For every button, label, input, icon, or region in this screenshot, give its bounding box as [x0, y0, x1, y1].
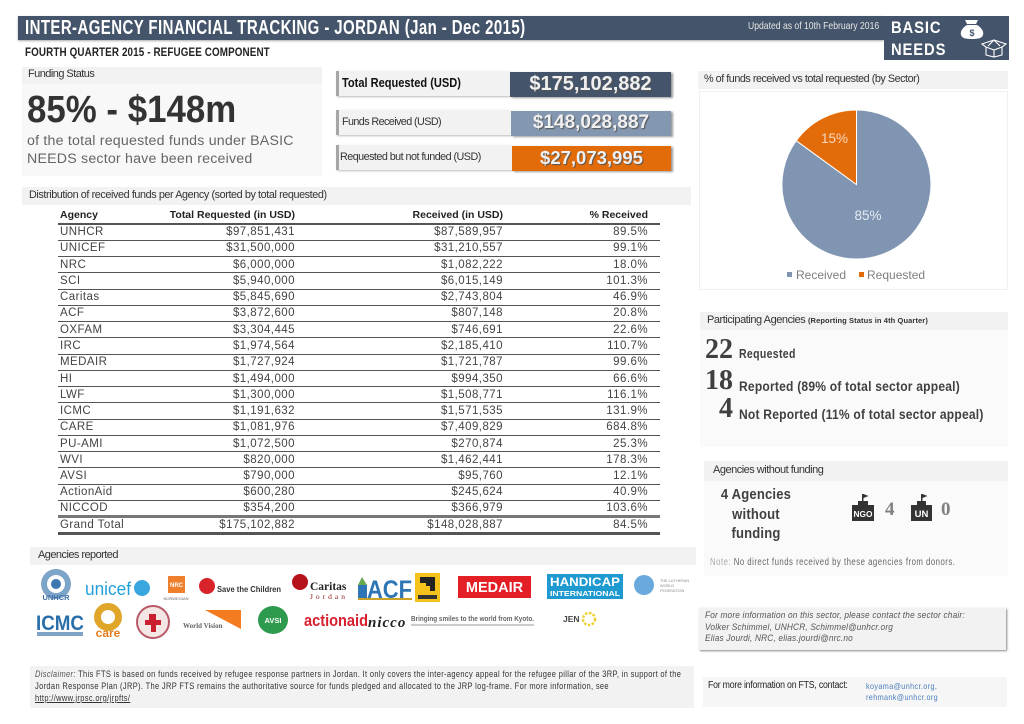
pie chart: received vs requested [699, 91, 1008, 290]
icon: UN: UN [915, 509, 928, 520]
stat label: Funds Received (USD) [342, 116, 441, 128]
table: funds per agency: WVI [60, 454, 83, 466]
heading: agencies reported [30, 547, 696, 565]
table: funds per agency: $6,015,149 [441, 275, 503, 287]
table: funds per agency: $1,081,976 [233, 421, 295, 433]
table: funds per agency: $5,845,690 [233, 291, 295, 303]
stat value: $175,102,882 [529, 73, 652, 95]
table: funds per agency: NRC [60, 259, 86, 271]
table: funds per agency: OXFAM [60, 324, 103, 336]
table: funds per agency: HI [60, 373, 72, 385]
disclaimer text: http://www.jrpsc.org/jrpfts/ [35, 693, 130, 703]
icon: UN [911, 494, 932, 521]
logo: JEN: JEN [563, 614, 580, 624]
table: funds per agency: $820,000 [243, 454, 295, 466]
stat label [336, 71, 510, 96]
logo: JEN [563, 613, 595, 625]
value: UN count: 0 [941, 499, 950, 520]
table: funds per agency: $7,409,829 [441, 421, 503, 433]
table: funds per agency: LWF [60, 389, 85, 401]
icon: open box [981, 39, 1008, 58]
table: funds per agency: 18.0% [613, 259, 648, 271]
table: funds per agency: SCI [60, 275, 81, 287]
funding description [27, 133, 294, 166]
table: funds per agency: $97,851,431 [226, 226, 295, 238]
table: funds per agency: $1,727,924 [233, 356, 295, 368]
table: funds per agency: % Received [590, 209, 648, 221]
contact text [705, 610, 965, 643]
table: funds per agency: $148,028,887 [427, 519, 503, 531]
heading: distribution of funds [22, 187, 691, 205]
table: funds per agency: $3,872,600 [233, 307, 295, 319]
logo: ICMC: ICMC [36, 612, 84, 635]
table: funds per agency: 110.7% [607, 340, 648, 352]
heading: agencies without funding: Agencies without funding [713, 464, 823, 476]
table: funds per agency: $6,000,000 [233, 259, 295, 271]
pie chart: received vs requested: 15% [821, 131, 848, 146]
heading: funding status: Funding Status [28, 68, 94, 80]
table: funds per agency: IRC [60, 340, 81, 352]
logo: ACF: ACF [367, 576, 412, 604]
heading: pie chart [698, 71, 1008, 89]
contact emails: rehmank@unhcr.org [866, 692, 938, 702]
stat label: Requested but not funded (USD) [340, 151, 481, 163]
panel: participating agencies [700, 312, 1008, 447]
pie chart: received vs requested: Requested [867, 268, 925, 282]
table: funds per agency: $87,589,957 [434, 226, 503, 238]
funding description: of the total requested funds under BASIC [27, 133, 294, 149]
table: funds per agency: $175,102,882 [219, 519, 295, 531]
table: funds per agency: Caritas [60, 291, 100, 303]
logo: IRC [415, 573, 440, 602]
contact label: For more information on FTS, contact: [708, 680, 848, 691]
logo: Lutheran World Federation: THE LUTHERAN [660, 579, 689, 583]
stat value [510, 72, 671, 97]
table: funds per agency: $1,462,441 [441, 454, 503, 466]
pie chart: received vs requested: 85% [854, 208, 882, 223]
table: funds per agency: $1,721,787 [441, 356, 503, 368]
table: funds per agency: 22.6% [613, 324, 648, 336]
table: funds per agency: CARE [60, 421, 94, 433]
table: funds per agency: 20.8% [613, 307, 648, 319]
table: funds per agency: 103.6% [606, 502, 648, 514]
table: funds per agency: $1,494,000 [233, 373, 295, 385]
logo: NRC [163, 576, 189, 601]
table: funds per agency: $1,571,535 [441, 405, 503, 417]
count: reported: Reported (89% of total sector appeal) [739, 379, 960, 395]
logo: Save the Children: Save the Children [217, 585, 281, 594]
table: funds per agency: NICCOD [60, 502, 108, 514]
table: funds per agency: $2,743,804 [441, 291, 503, 303]
logo: CARE: care [96, 626, 121, 640]
icon: money bag: $ [969, 28, 975, 38]
logo: NICCOD: Bringing smiles to the world from Kyoto. [411, 616, 534, 623]
logo: NRC: NORWEGIAN [163, 596, 189, 601]
table: funds per agency: $1,508,771 [441, 389, 503, 401]
heading: agencies reported: Agencies reported [38, 549, 118, 561]
heading: pie chart: % of funds received vs total requested (by Sector) [704, 73, 919, 85]
table: funds per agency: $2,185,410 [441, 340, 503, 352]
count: requested: 22 [705, 334, 733, 365]
logo: CARE [96, 606, 121, 640]
count: reported: 18 [705, 365, 733, 396]
stat label [336, 145, 512, 170]
table: funds per agency: $746,691 [451, 324, 503, 336]
table: funds per agency: MEDAIR [60, 356, 107, 368]
stat: requested but not funded [336, 145, 674, 174]
table: funds per agency: $95,760 [458, 470, 503, 482]
logo: UNHCR: UNHCR [42, 593, 70, 602]
logo: Caritas Jordan: Caritas [310, 581, 347, 593]
stat: funds received [336, 110, 674, 138]
panel: funding status [22, 67, 322, 176]
contact text: Elias Jourdi, NRC, elias.jourdi@nrc.no [705, 633, 853, 643]
logo: World Vision [183, 610, 241, 630]
table: funds per agency: ICMC [60, 405, 91, 417]
table: funds per agency: Grand Total [60, 519, 124, 531]
disclaimer text [35, 669, 681, 703]
table: funds per agency: Total Requested (in USD) [170, 209, 295, 221]
table: funds per agency [58, 209, 660, 535]
table: funds per agency: 40.9% [613, 486, 648, 498]
table: funds per agency: $1,974,564 [233, 340, 295, 352]
value: NGO count: 4 [885, 499, 894, 520]
table: funds per agency: ActionAid [60, 486, 113, 498]
heading: funding status [22, 67, 322, 84]
sector chair contact [699, 608, 1006, 650]
sector name: BASIC NEEDS [891, 18, 946, 59]
funding note: Note: No direct funds received by these agencies from donors. [710, 557, 955, 568]
table: funds per agency: $270,874 [451, 438, 503, 450]
count text: 4 Agencies without funding [721, 487, 791, 542]
table: funds per agency: 178.3% [606, 454, 648, 466]
table: funds per agency: 46.9% [613, 291, 648, 303]
stat: total requested [336, 71, 674, 100]
table: funds per agency: $245,624 [451, 486, 503, 498]
table: funds per agency: UNHCR [60, 226, 104, 238]
table: funds per agency: 131.9% [606, 405, 648, 417]
table: funds per agency: $1,082,222 [441, 259, 503, 271]
logo: Handicap International: HANDICAP [550, 575, 620, 589]
subtitle: FOURTH QUARTER 2015 - REFUGEE COMPONENT [25, 45, 270, 59]
pie chart: received vs requested: Received [796, 268, 846, 282]
table: funds per agency: $31,210,557 [434, 242, 503, 254]
count: not reported: Not Reported (11% of total sector appeal) [739, 407, 984, 423]
table: funds per agency: 89.5% [613, 226, 648, 238]
logo: Caritas Jordan [292, 574, 348, 601]
logo: Caritas Jordan: Jordan [310, 592, 348, 601]
count: reported [705, 365, 960, 396]
table: funds per agency: 66.6% [613, 373, 648, 385]
count: not reported [719, 393, 984, 424]
table: funds per agency: 684.8% [606, 421, 648, 433]
table: funds per agency: PU-AMI [60, 438, 103, 450]
stat value: $27,073,995 [540, 147, 643, 168]
table: funds per agency: 99.6% [613, 356, 648, 368]
logo: MEDAIR [458, 576, 531, 598]
heading: agencies without funding [704, 461, 1008, 481]
table: funds per agency: 12.1% [613, 470, 648, 482]
table: funds per agency: Received (in USD) [413, 209, 503, 221]
table: funds per agency: Agency [60, 209, 98, 221]
FTS contact [703, 677, 1007, 707]
logo: AVSI: AVSI [265, 616, 281, 625]
sector badge: basic needs [884, 16, 1009, 60]
logo: ActionAid: actionaid [304, 611, 368, 630]
table: funds per agency: ACF [60, 307, 84, 319]
table: funds per agency: $366,979 [451, 502, 503, 514]
count: not reported: 4 [719, 393, 733, 424]
contact emails: koyama@unhcr.org, [866, 681, 937, 691]
logo: World Vision: World Vision [183, 622, 223, 630]
table: funds per agency: AVSI [60, 470, 87, 482]
stat label: Total Requested (USD) [342, 75, 461, 90]
logo: NICCOD: nicco [368, 615, 406, 631]
table: funds per agency: 25.3% [613, 438, 648, 450]
logo: Save the Children [199, 578, 281, 594]
stat value [511, 111, 671, 136]
panel: agencies without funding [704, 461, 1008, 576]
table: funds per agency: $1,300,000 [233, 389, 295, 401]
table: funds per agency: $3,304,445 [233, 324, 295, 336]
table: funds per agency: $31,500,000 [226, 242, 295, 254]
logo: Handicap International: INTERNATIONAL [550, 589, 620, 598]
table: funds per agency: $807,148 [451, 307, 503, 319]
title text: INTER-AGENCY FINANCIAL TRACKING - JORDAN (Jan - Dec 2015) [25, 17, 526, 39]
contact emails [866, 681, 938, 702]
stat value [512, 146, 671, 171]
table: funds per agency: $994,350 [451, 373, 503, 385]
heading: participating agencies: Participating Agencies (Reporting Status in 4th Quarter) [707, 314, 928, 326]
logo: NICCOD [368, 615, 534, 631]
table: funds per agency: $5,940,000 [233, 275, 295, 287]
table: funds per agency: 84.5% [613, 519, 648, 531]
table: funds per agency: $790,000 [243, 470, 295, 482]
funding description: NEEDS sector have been received [27, 150, 252, 166]
contact text: For more information on this sector, please contact the sector chair: [705, 610, 965, 620]
disclaimer text: Disclaimer: This FTS is based on funds received by refugee response partners in Jordan. It only covers the inter-agency appeal for the refugee pillar of the 3RP, in support of the [35, 669, 681, 679]
stat value: $148,028,887 [533, 112, 649, 133]
table: funds per agency: 116.1% [607, 389, 648, 401]
headline figure: 85% - $148m [27, 89, 236, 131]
count: requested: Requested [739, 347, 796, 361]
logo: Lutheran World Federation: FEDERATION [660, 589, 684, 593]
disclaimer [30, 666, 694, 708]
table: funds per agency: UNICEF [60, 242, 106, 254]
logo: MEDAIR: MEDAIR [466, 580, 524, 596]
table: funds per agency: 99.1% [613, 242, 648, 254]
logos: reporting agencies [36, 569, 689, 640]
table: funds per agency: $354,200 [243, 502, 295, 514]
heading: participating agencies [700, 312, 1008, 330]
table: funds per agency: 101.3% [606, 275, 648, 287]
stat label [336, 110, 512, 135]
logo: Lutheran World Federation: WORLD [660, 584, 674, 588]
title banner [18, 16, 884, 40]
logo: Lutheran World Federation [634, 575, 689, 595]
logo: Handicap International [547, 574, 623, 599]
icon: NGO [852, 494, 874, 521]
table: funds per agency: $1,191,632 [233, 405, 295, 417]
logo: UNHCR [41, 569, 71, 602]
icon: NGO: NGO [854, 509, 873, 519]
disclaimer text: Jordan Response Plan (JRP). The JRP FTS remains the authoritative source for funds pledged and allocated to the JRP log-frame. For more information, see [35, 681, 609, 691]
count: requested [705, 334, 796, 365]
table: funds per agency: $1,072,500 [233, 438, 295, 450]
logo: AVSI [258, 606, 288, 634]
contact text: Volker Schimmel, UNHCR, Schimmel@unhcr.org [705, 622, 893, 632]
logo: NRC: NRC [170, 583, 184, 589]
logo: PU-AMI [137, 606, 169, 638]
logo: UNICEF: unicef [85, 579, 132, 599]
heading: distribution of funds: Distribution of received funds per Agency (sorted by total requested) [29, 189, 327, 201]
table: funds per agency: $600,280 [243, 486, 295, 498]
icon: money bag [960, 20, 984, 39]
update date: Updated as of 10th February 2016 [748, 20, 879, 32]
